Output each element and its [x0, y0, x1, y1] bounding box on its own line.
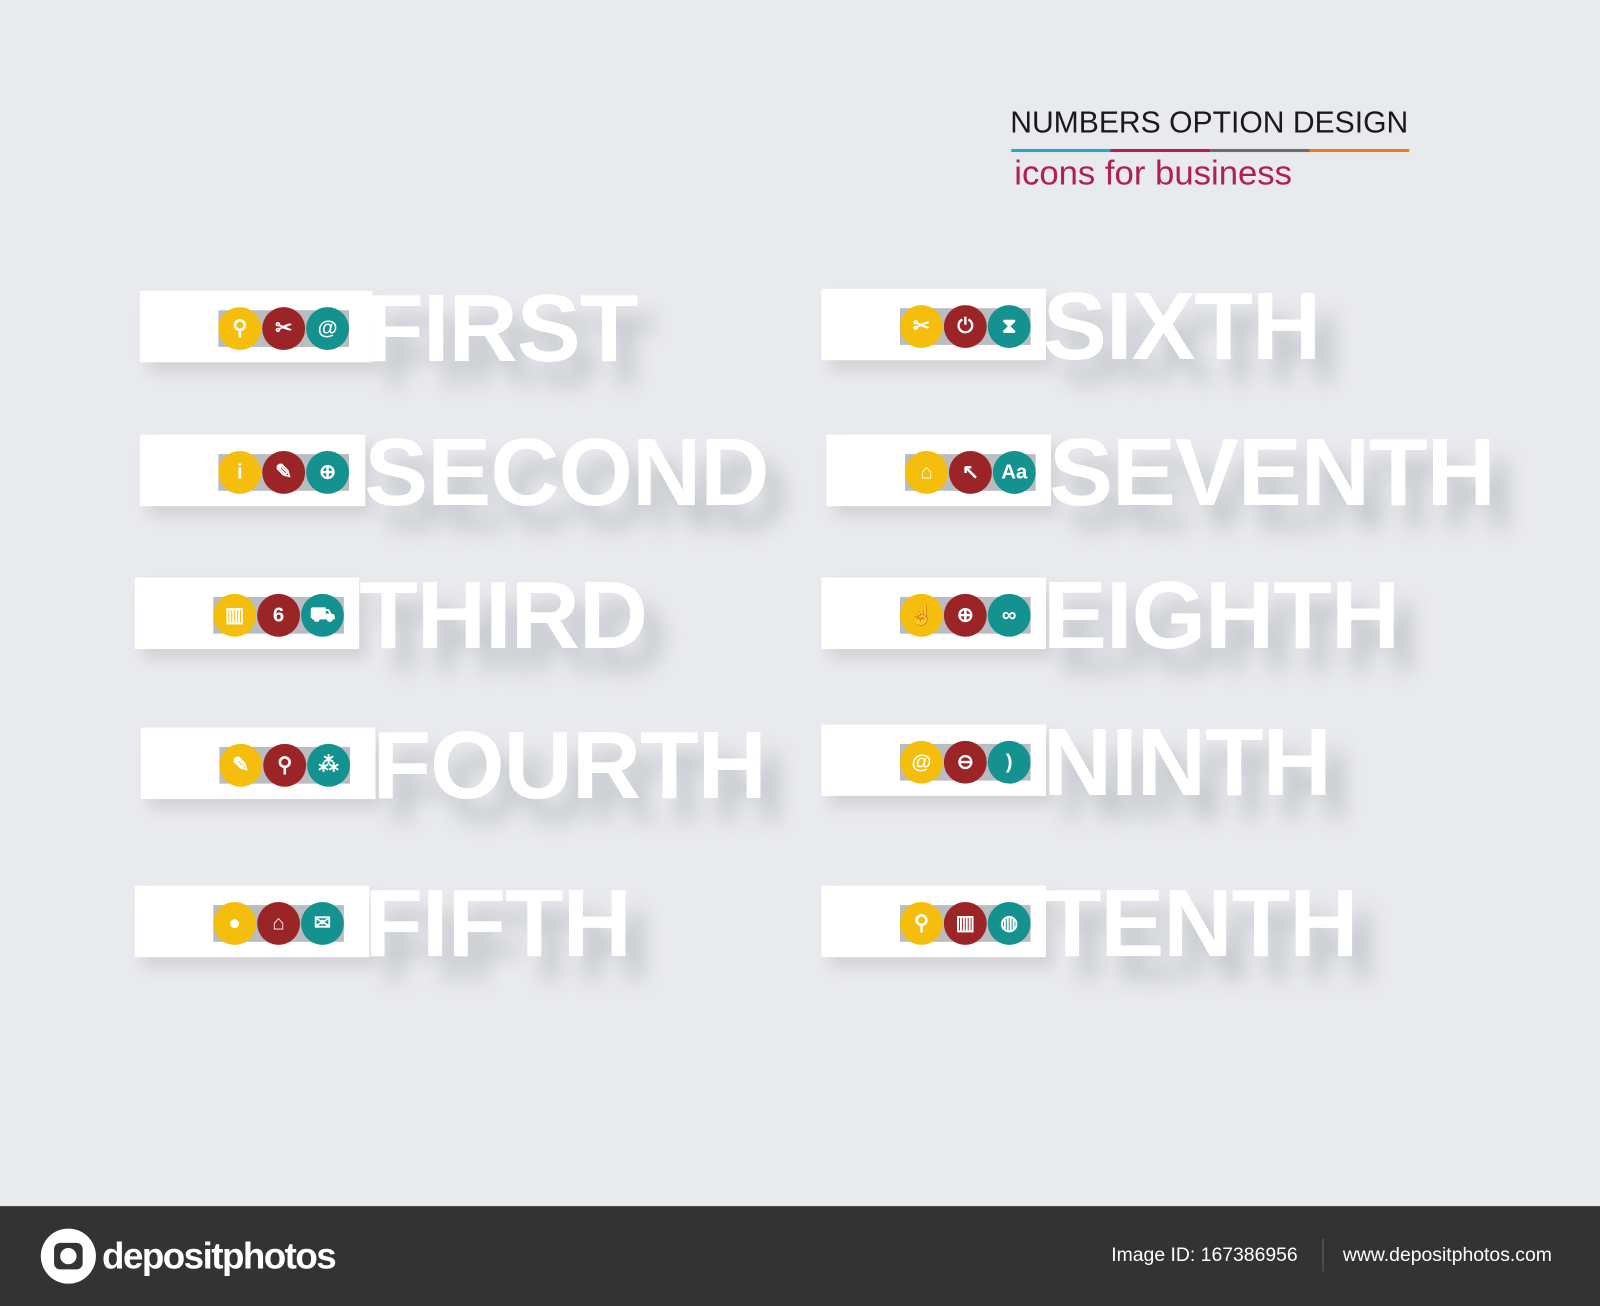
row: eighth	[822, 561, 1420, 680]
row: second: i	[237, 461, 243, 484]
image id: Image ID: 167386956	[1111, 1245, 1298, 1266]
icons: search tools spiral	[218, 307, 349, 350]
row: seventh: ⌂	[920, 461, 933, 484]
row: ninth: @	[911, 751, 931, 773]
word: THIRD	[359, 561, 647, 668]
title: NUMBERS OPTION DESIGN	[1010, 106, 1408, 140]
word: FIRST	[365, 274, 637, 382]
row: eighth: ☝	[909, 604, 934, 627]
icons: info pen globe	[218, 451, 349, 494]
icons: user home mail	[213, 902, 344, 945]
row: second	[140, 418, 790, 536]
row: fifth: ⌂	[272, 912, 285, 935]
word: SEVENTH	[1049, 418, 1495, 526]
row: fourth	[141, 711, 786, 830]
footer bar	[0, 1206, 1600, 1306]
row: third: 6	[273, 604, 284, 627]
icons: chart disc cart	[213, 594, 344, 637]
title	[1010, 106, 1410, 193]
row: third	[134, 561, 669, 680]
row: second: ⊕	[319, 461, 336, 484]
word: EIGHTH	[1043, 561, 1399, 668]
row: fourth: ⁂	[318, 754, 339, 777]
icons: hand globe link	[900, 594, 1031, 637]
icons: at lock rss	[900, 740, 1031, 784]
row: second: ✎	[275, 461, 292, 484]
row: eighth: ∞	[1002, 604, 1016, 627]
row: fifth: ●	[229, 912, 241, 935]
row: tenth: ⚲	[914, 912, 929, 935]
icons: tools power hourglass	[900, 305, 1031, 348]
word: SIXTH	[1043, 272, 1320, 380]
logo: depositphotos	[102, 1235, 335, 1277]
site url: www.depositphotos.com	[1343, 1245, 1552, 1266]
row: seventh: Aa	[1001, 461, 1027, 484]
row: seventh: ↖	[962, 461, 979, 484]
row: fourth: ✎	[232, 754, 249, 777]
row: sixth: ⧗	[1002, 315, 1016, 338]
row: sixth: ⏻	[957, 315, 973, 338]
word: FOURTH	[372, 711, 766, 818]
row: first: @	[318, 317, 337, 340]
row: eighth: ⊕	[957, 604, 974, 627]
row: third: ▥	[225, 604, 244, 627]
row: third: ⛟	[310, 604, 335, 627]
row: sixth: ✂	[913, 315, 930, 338]
word: SECOND	[364, 418, 769, 526]
row: fifth: ✉	[314, 912, 331, 935]
row: sixth	[822, 272, 1340, 390]
row: tenth: ▥	[956, 912, 975, 935]
icons: pencil search network	[219, 744, 350, 787]
word: TENTH	[1043, 869, 1357, 977]
row: first: ⚲	[232, 317, 247, 340]
word: NINTH	[1043, 708, 1331, 815]
row: fifth	[134, 869, 651, 984]
row: tenth: ◍	[1000, 912, 1018, 935]
row: ninth: ⊖	[957, 751, 974, 773]
row: tenth	[822, 869, 1378, 988]
row: first	[140, 274, 656, 392]
row: fourth: ⚲	[277, 754, 292, 777]
row: ninth: )	[1006, 751, 1013, 773]
logo	[40, 1228, 336, 1284]
word: FIFTH	[364, 869, 631, 977]
row: seventh	[826, 418, 1515, 536]
row: first: ✂	[275, 317, 292, 340]
icons: pin chart ball	[900, 902, 1031, 945]
title: icons for business	[1014, 154, 1292, 193]
row: ninth	[822, 708, 1351, 824]
icons: home cursor font	[905, 451, 1036, 494]
